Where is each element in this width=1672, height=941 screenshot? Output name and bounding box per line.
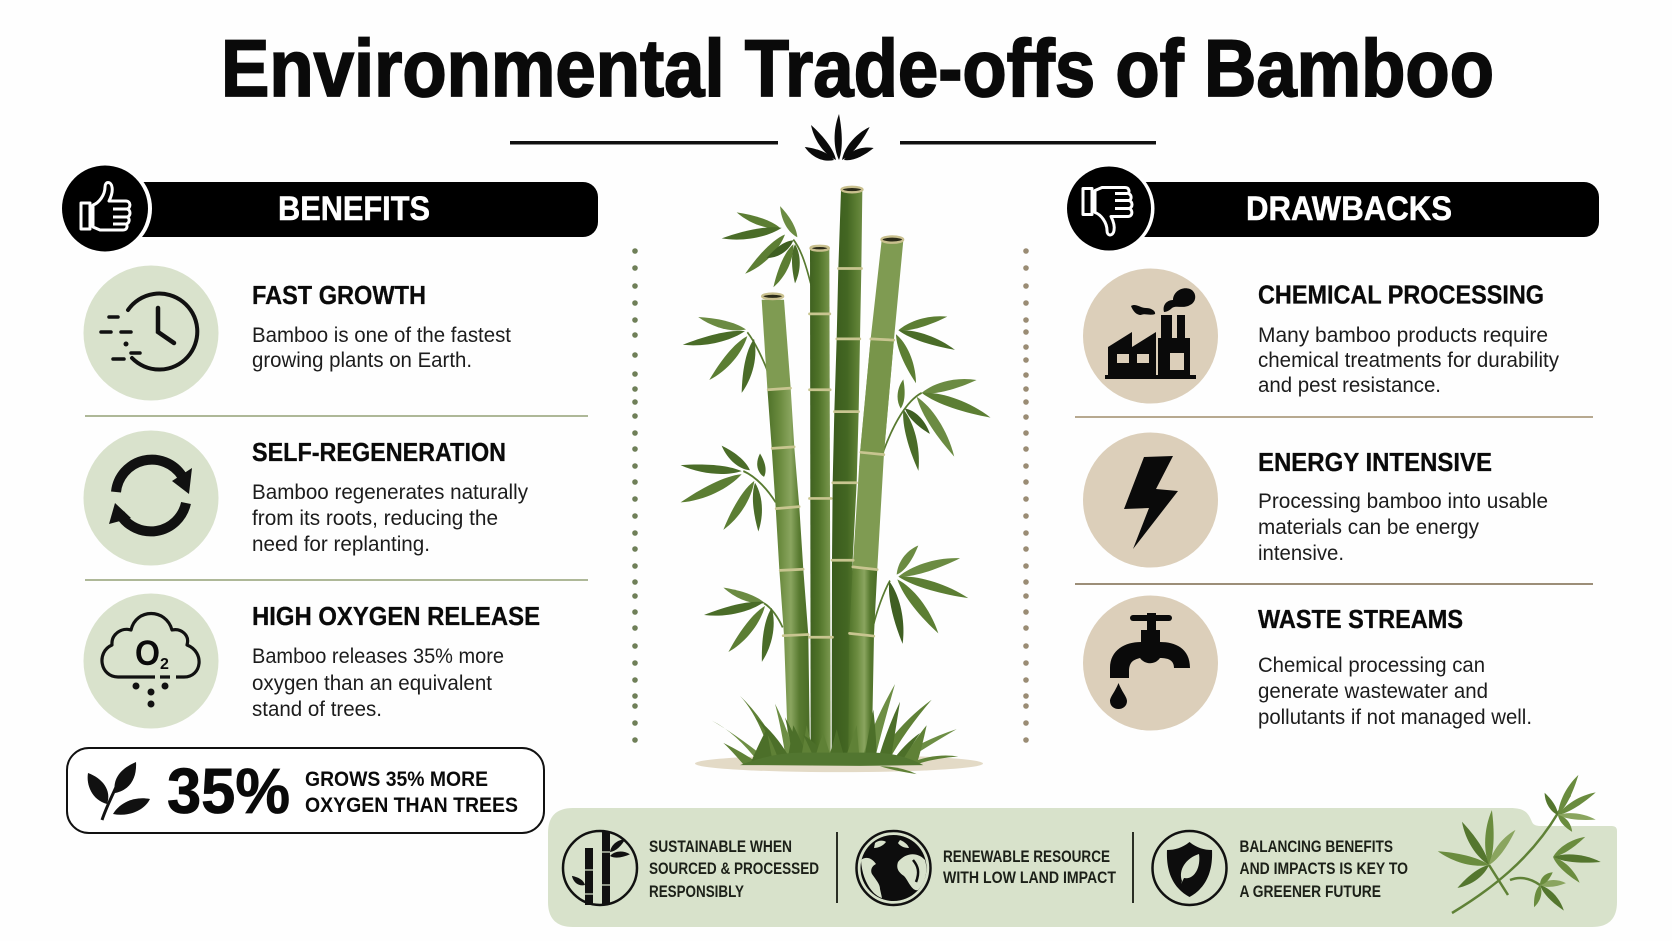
text bbox=[649, 837, 819, 901]
text block: Bamboo regenerates naturally bbox=[252, 481, 528, 504]
panel: bottom summary band bbox=[548, 773, 1617, 927]
text: A GREENER FUTURE bbox=[1240, 882, 1381, 901]
icon: lightning bolt bbox=[1083, 432, 1218, 568]
text block: Many bamboo products require bbox=[1258, 324, 1548, 347]
item: renewable bbox=[856, 831, 1117, 905]
text block: generate wastewater and bbox=[1258, 680, 1488, 703]
heading: CHEMICAL PROCESSING bbox=[1258, 280, 1544, 310]
text block: Bamboo releases 35% more bbox=[252, 645, 504, 668]
title divider with leaf emblem bbox=[510, 114, 1156, 165]
icon: oxygen cloud: 2 bbox=[160, 656, 169, 673]
callout text bbox=[305, 768, 518, 817]
text: SUSTAINABLE WHEN bbox=[649, 837, 792, 856]
illustration: bamboo stalks bbox=[679, 187, 992, 774]
benefit: self-regeneration bbox=[84, 430, 528, 566]
drawback: chemical processing bbox=[1083, 268, 1559, 404]
heading: SELF-REGENERATION bbox=[252, 437, 506, 467]
item: sustainable bbox=[563, 831, 819, 905]
text: SOURCED & PROCESSED bbox=[649, 859, 819, 878]
text bbox=[1240, 837, 1408, 901]
text block bbox=[1258, 490, 1548, 565]
benefit: fast growth bbox=[84, 266, 511, 400]
text block: materials can be energy bbox=[1258, 516, 1479, 539]
text block: Chemical processing can bbox=[1258, 654, 1485, 677]
icon: factory bbox=[1083, 268, 1218, 404]
illustration: bamboo branch bbox=[1436, 773, 1601, 913]
benefit: high oxygen release bbox=[84, 594, 540, 728]
text block bbox=[1258, 654, 1532, 729]
icon: oxygen cloud bbox=[84, 594, 218, 728]
grass bbox=[712, 684, 958, 774]
text bbox=[943, 847, 1117, 887]
text block: need for replanting. bbox=[252, 533, 430, 556]
title: Environmental Trade-offs of Bamboo bbox=[221, 24, 1494, 114]
text block bbox=[1258, 324, 1559, 397]
text block: chemical treatments for durability bbox=[1258, 349, 1559, 372]
text: AND IMPACTS IS KEY TO bbox=[1240, 859, 1408, 878]
drawback: waste streams bbox=[1083, 596, 1532, 730]
text block: Processing bamboo into usable bbox=[1258, 490, 1548, 513]
text block bbox=[252, 324, 511, 372]
benefits header: BENEFITS bbox=[278, 190, 430, 228]
icon: globe bbox=[856, 831, 930, 905]
text: RESPONSIBLY bbox=[649, 882, 745, 901]
heading: WASTE STREAMS bbox=[1258, 604, 1463, 634]
callout: 35% stat: 35% bbox=[167, 755, 290, 827]
text block: growing plants on Earth. bbox=[252, 349, 472, 372]
item: balancing bbox=[1152, 831, 1408, 905]
icon: regeneration arrows bbox=[84, 430, 218, 566]
drawback: energy intensive bbox=[1083, 432, 1548, 568]
text block: and pest resistance. bbox=[1258, 374, 1441, 397]
panel: drawbacks bbox=[1066, 164, 1599, 730]
panel: benefits bbox=[60, 162, 598, 833]
text: WITH LOW LAND IMPACT bbox=[943, 868, 1117, 887]
icon: bamboo in circle bbox=[563, 831, 637, 905]
callout: 35% stat bbox=[67, 748, 544, 833]
heading: FAST GROWTH bbox=[252, 280, 426, 310]
text block: stand of trees. bbox=[252, 698, 382, 721]
icon: oxygen cloud: O bbox=[135, 634, 160, 673]
text: RENEWABLE RESOURCE bbox=[943, 847, 1110, 866]
text block: Bamboo is one of the fastest bbox=[252, 324, 511, 347]
callout text: GROWS 35% MORE bbox=[305, 768, 488, 791]
drawbacks header bbox=[1066, 164, 1599, 253]
text block bbox=[252, 481, 528, 556]
dotted divider right bbox=[1023, 248, 1029, 743]
text block: oxygen than an equivalent bbox=[252, 672, 492, 695]
benefits header bbox=[60, 162, 598, 254]
text block: intensive. bbox=[1258, 542, 1344, 565]
text: BALANCING BENEFITS bbox=[1240, 837, 1393, 856]
drawbacks header: DRAWBACKS bbox=[1246, 190, 1452, 228]
heading: HIGH OXYGEN RELEASE bbox=[252, 601, 540, 631]
dotted divider left bbox=[632, 248, 638, 743]
icon: clock bbox=[84, 266, 218, 400]
text block: pollutants if not managed well. bbox=[1258, 706, 1532, 729]
icon: shield with leaf bbox=[1152, 831, 1226, 905]
callout text: OXYGEN THAN TREES bbox=[305, 794, 518, 817]
text block: from its roots, reducing the bbox=[252, 507, 498, 530]
icon: sprout bbox=[88, 762, 150, 820]
heading: ENERGY INTENSIVE bbox=[1258, 447, 1492, 477]
icon: dripping faucet bbox=[1083, 596, 1218, 730]
text block bbox=[252, 645, 504, 721]
